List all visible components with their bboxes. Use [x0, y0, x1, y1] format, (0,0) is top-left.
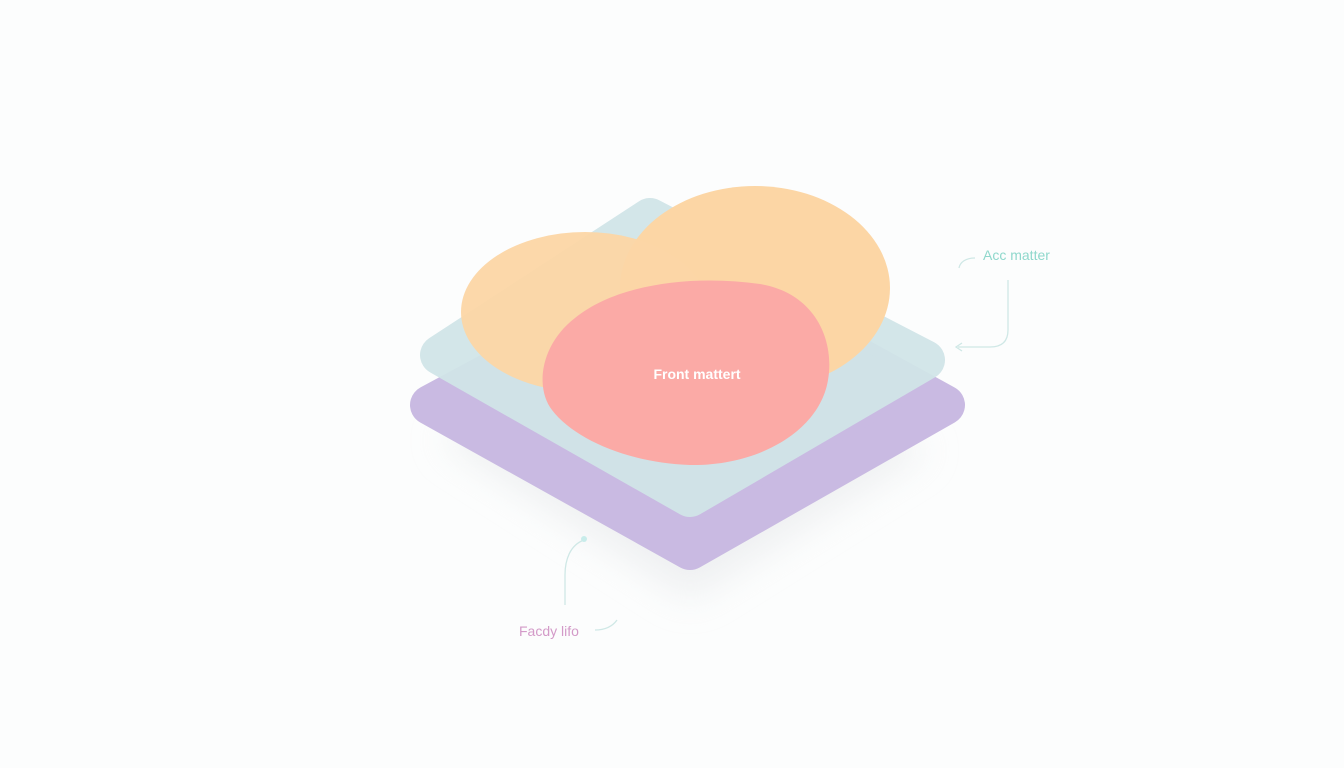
callout: Acc matter [956, 247, 1050, 351]
shadow [440, 320, 930, 600]
callout: Facdy lifo [519, 536, 617, 639]
layer: purple base [430, 265, 945, 550]
callout: Acc matter: Acc matter [983, 247, 1050, 263]
blob: large orange [620, 186, 890, 390]
blob: pink front matter [543, 280, 829, 465]
callout: Facdy lifo: Facdy lifo [519, 623, 579, 639]
blob: small orange [461, 232, 709, 392]
label: Front matter: Front mattert [653, 366, 741, 382]
layer: blue middle [440, 218, 925, 497]
